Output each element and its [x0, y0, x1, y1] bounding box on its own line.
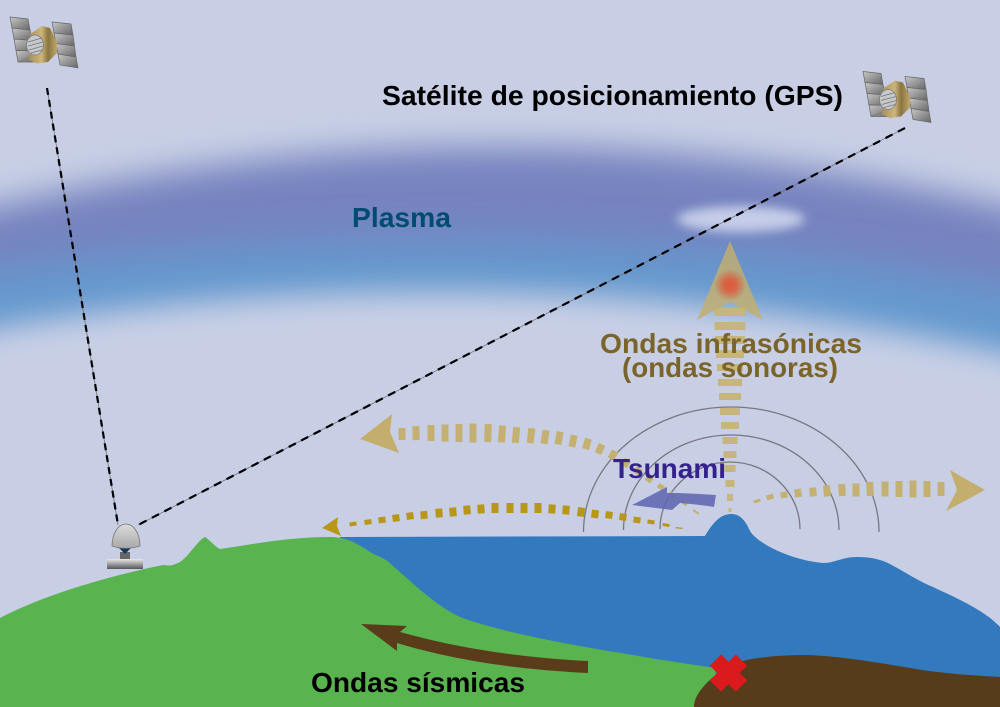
arrow: tsunami	[632, 487, 716, 510]
plasma band	[0, 147, 1000, 590]
signal line: right satellite to receiver	[138, 128, 905, 525]
icon: left GPS satellite	[10, 17, 78, 68]
concentric wave arcs	[584, 407, 879, 532]
icon: GPS ground receiver	[107, 524, 143, 569]
land: green continent	[0, 537, 720, 707]
label: infrasonic waves	[600, 328, 862, 383]
label: infrasonic waves: (ondas sonoras)	[622, 352, 838, 383]
arrow: infrasonic waves going up	[697, 241, 763, 512]
seabed: brown plate	[694, 655, 1000, 707]
arrow: atmospheric wave low over the sea	[322, 508, 682, 536]
icon: earthquake epicentre cross	[716, 660, 742, 686]
arrow: seismic waves	[361, 624, 588, 673]
signal line: left satellite to receiver	[47, 88, 118, 525]
label: infrasonic waves: Ondas infrasónicas	[600, 328, 862, 359]
plasma disturbance cloud	[677, 206, 805, 232]
label: Ondas sísmicas: Ondas sísmicas	[311, 667, 525, 698]
label: Plasma: Plasma	[352, 202, 451, 233]
arrow: infrasonic waves to the right	[754, 470, 985, 511]
label: Tsunami: Tsunami	[613, 453, 726, 484]
arrow: infrasonic waves to the left	[360, 414, 699, 514]
icon: right GPS satellite	[863, 72, 931, 122]
label: GPS satellite: Satélite de posicionamiento (GPS)	[382, 80, 843, 111]
water: ocean	[340, 514, 1000, 690]
